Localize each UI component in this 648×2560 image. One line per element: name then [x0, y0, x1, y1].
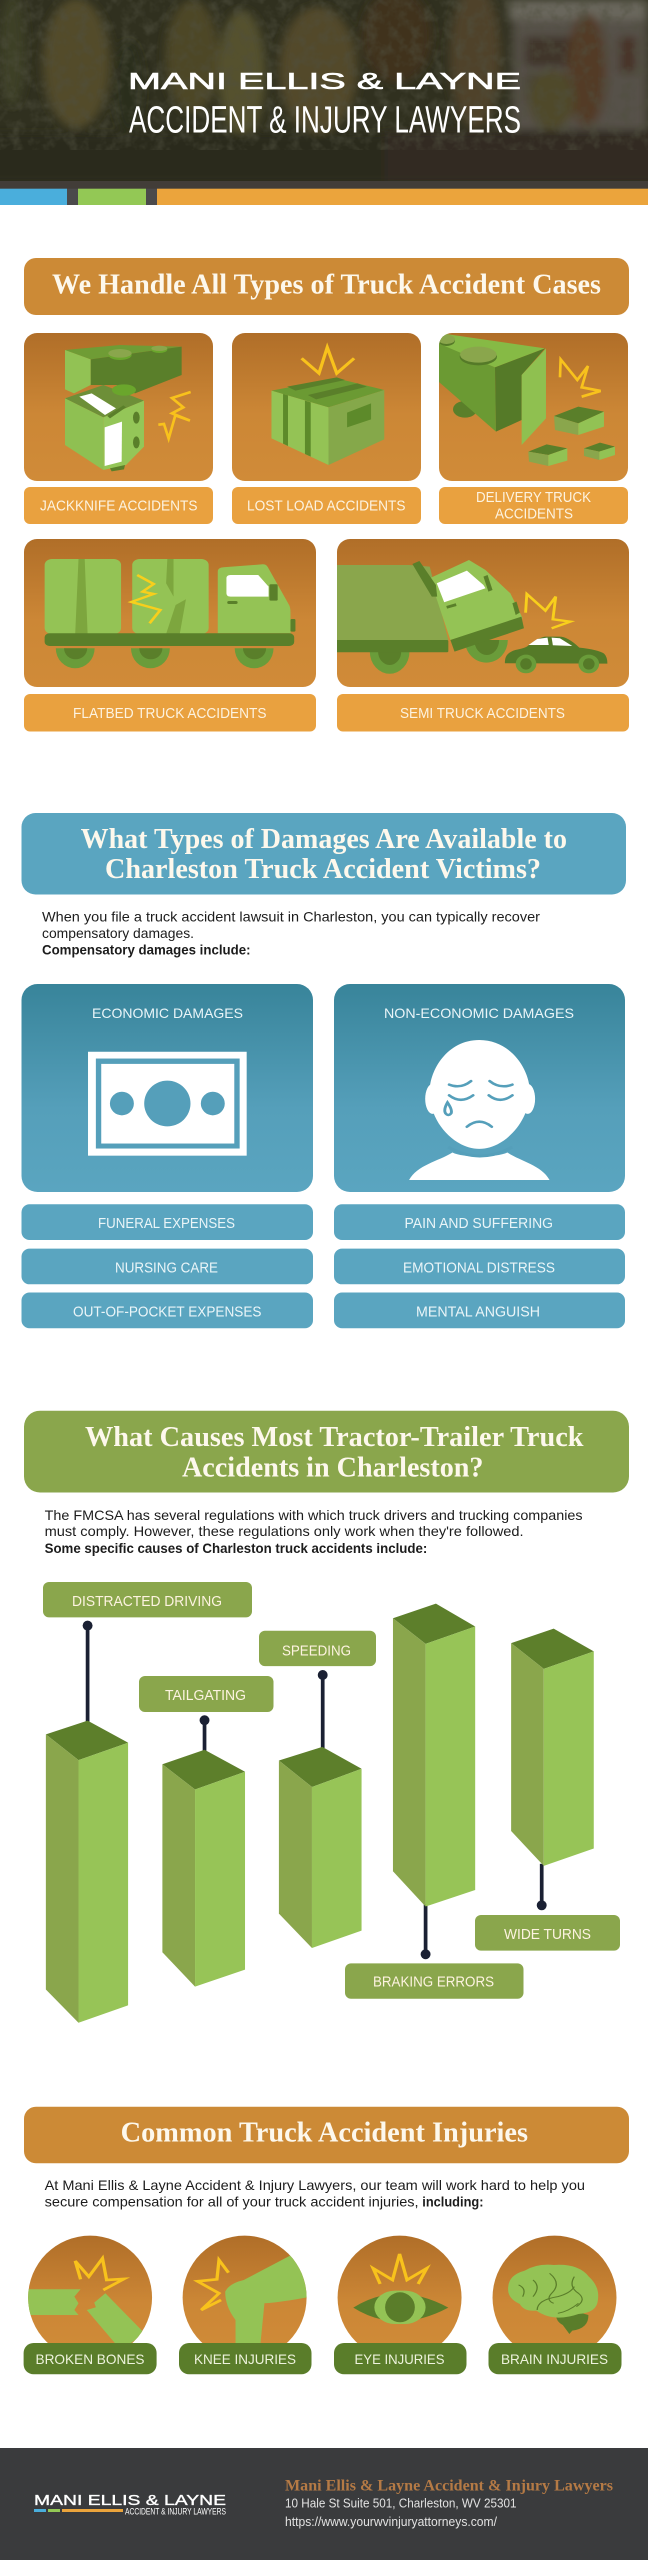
heading: causes: What Causes Most Tractor-Trailer Truck: [85, 1421, 584, 1453]
text block: causes intro: The FMCSA has several regulations with which truck drivers and trucking companies: [45, 1507, 583, 1523]
label: wide turns: [475, 1915, 620, 1951]
footer: [0, 2448, 648, 2560]
panel: delivery truck accidents: [437, 333, 628, 481]
footer contact details: Mani Ellis & Layne Accident & Injury Lawyers: [285, 2478, 613, 2495]
panel: flatbed truck accidents: [24, 539, 316, 687]
text block: causes intro: [45, 1507, 583, 1556]
footer logo: MANI ELLIS & LAYNE: [34, 2493, 226, 2509]
label: delivery truck: DELIVERY TRUCK: [476, 490, 591, 506]
label: semi truck: SEMI TRUCK ACCIDENTS: [400, 706, 565, 722]
list: economic damages: NURSING CARE: [115, 1260, 218, 1276]
panel: semi truck accidents: [335, 539, 629, 687]
panel: lost load accidents: [232, 333, 421, 481]
panel: non-economic damages: NON-ECONOMIC DAMAGES: [384, 1005, 574, 1021]
injury: eye injuries: [334, 2236, 466, 2374]
panel: economic damages: [22, 984, 313, 1192]
icon: crying face: [409, 1040, 550, 1180]
header banner: [0, 0, 648, 205]
panel: jackknife accidents: [24, 333, 213, 481]
label: distracted driving: [43, 1582, 252, 1617]
icon: injured knee: [182, 2236, 307, 2343]
text block: damages intro: compensatory damages.: [42, 925, 194, 941]
injury: knee injuries: KNEE INJURIES: [194, 2351, 296, 2367]
text block: injuries intro: including:: [422, 2194, 484, 2210]
icon: brain: [493, 2236, 616, 2360]
text block: damages intro: Compensatory damages include:: [42, 941, 250, 957]
text block: injuries intro: At Mani Ellis & Layne Accident & Injury Lawyers, our team will work hard to help you: [45, 2177, 585, 2193]
label: braking errors: [345, 1963, 524, 1999]
injury: eye injuries: EYE INJURIES: [354, 2351, 444, 2367]
injury: knee injuries: [179, 2236, 314, 2374]
label: delivery truck: ACCIDENTS: [495, 507, 573, 523]
icon: semi truck hitting car: [335, 560, 607, 674]
text block: injuries intro: secure compensation for all of your truck accident injuries,: [45, 2194, 419, 2210]
section: truck accident types: [24, 258, 629, 732]
text block: damages intro: When you file a truck accident lawsuit in Charleston, you can typically recover: [42, 908, 540, 924]
text block: causes intro: Some specific causes of Charleston truck accidents include:: [45, 1540, 427, 1556]
label: tailgating: TAILGATING: [165, 1687, 246, 1704]
footer contact details: https://www.yourwvinjuryattorneys.com/: [285, 2515, 498, 2529]
label: wide turns: WIDE TURNS: [504, 1926, 591, 1943]
heading: causes: [24, 1411, 629, 1492]
section: damages: [22, 813, 626, 1328]
label: distracted driving: DISTRACTED DRIVING: [72, 1593, 222, 1610]
icon: banknote: [88, 1052, 247, 1156]
label: flatbed truck: FLATBED TRUCK ACCIDENTS: [73, 706, 266, 722]
panel: non-economic damages: [334, 984, 625, 1192]
heading: causes: Accidents in Charleston?: [182, 1451, 484, 1483]
bars: [46, 1604, 594, 2023]
icon: impact spark: [158, 392, 191, 439]
injury: broken bones: [24, 2236, 157, 2374]
icon: flatbed truck: [45, 559, 295, 668]
list: non-economic damages: PAIN AND SUFFERING: [404, 1216, 553, 1232]
icon: broken bone: [28, 2236, 152, 2343]
list: non-economic damages: [334, 1204, 625, 1328]
label: speeding: SPEEDING: [282, 1643, 351, 1660]
injury: broken bones: BROKEN BONES: [36, 2351, 144, 2367]
icon: box with spark: [271, 347, 384, 465]
footer contact details: [285, 2478, 613, 2529]
footer logo: [34, 2493, 226, 2516]
text block: causes intro: must comply. However, these regulations only work when they're followed.: [45, 1523, 524, 1539]
section: causes: [24, 1411, 629, 2023]
colour strips: [0, 189, 648, 205]
heading: types of damages: [22, 813, 626, 894]
list: economic damages: OUT-OF-POCKET EXPENSES: [73, 1304, 262, 1320]
list: non-economic damages: MENTAL ANGUISH: [416, 1304, 540, 1320]
list: non-economic damages: EMOTIONAL DISTRESS: [403, 1260, 555, 1276]
panel: economic damages: ECONOMIC DAMAGES: [92, 1005, 243, 1021]
label: delivery truck: [439, 487, 628, 524]
list: economic damages: FUNERAL EXPENSES: [98, 1216, 235, 1232]
heading: types of damages: What Types of Damages Are Available to: [81, 824, 567, 855]
label: semi truck: [337, 694, 629, 732]
heading: common injuries: Common Truck Accident Injuries: [121, 2118, 528, 2149]
icon: delivery truck and boxes: [437, 333, 615, 466]
label: flatbed truck: [24, 694, 316, 732]
footer logo: ACCIDENT & INJURY LAWYERS: [125, 2506, 226, 2516]
icon: eye: [338, 2236, 462, 2360]
injury: brain injuries: [488, 2236, 622, 2374]
chart: 3D bars with labels: [43, 1582, 620, 2023]
label: tailgating: [139, 1676, 274, 1712]
list: economic damages: [22, 1204, 313, 1328]
injury: brain injuries: BRAIN INJURIES: [501, 2351, 608, 2367]
icon: jackknifed truck: [65, 345, 182, 471]
text block: damages intro: [42, 908, 540, 957]
label: jackknife: JACKKNIFE ACCIDENTS: [40, 499, 198, 515]
section: injuries: [24, 2107, 629, 2374]
label: lost load: [232, 487, 421, 524]
label: braking errors: BRAKING ERRORS: [373, 1974, 494, 1991]
text block: injuries intro: [45, 2177, 585, 2210]
heading: types of damages: Charleston Truck Accident Victims?: [105, 854, 541, 885]
heading: we handle all types: We Handle All Types of Truck Accident Cases: [52, 270, 601, 300]
firm name: MANI ELLIS & LAYNE: [128, 68, 521, 94]
header photo: trees and building: [0, 0, 648, 189]
label: jackknife: [24, 487, 213, 524]
label: lost load: LOST LOAD ACCIDENTS: [247, 499, 406, 515]
footer contact details: 10 Hale St Suite 501, Charleston, WV 25301: [285, 2496, 517, 2510]
label: speeding: [259, 1631, 376, 1666]
heading: common injuries: [24, 2107, 629, 2163]
heading: we handle all types: [24, 258, 629, 315]
